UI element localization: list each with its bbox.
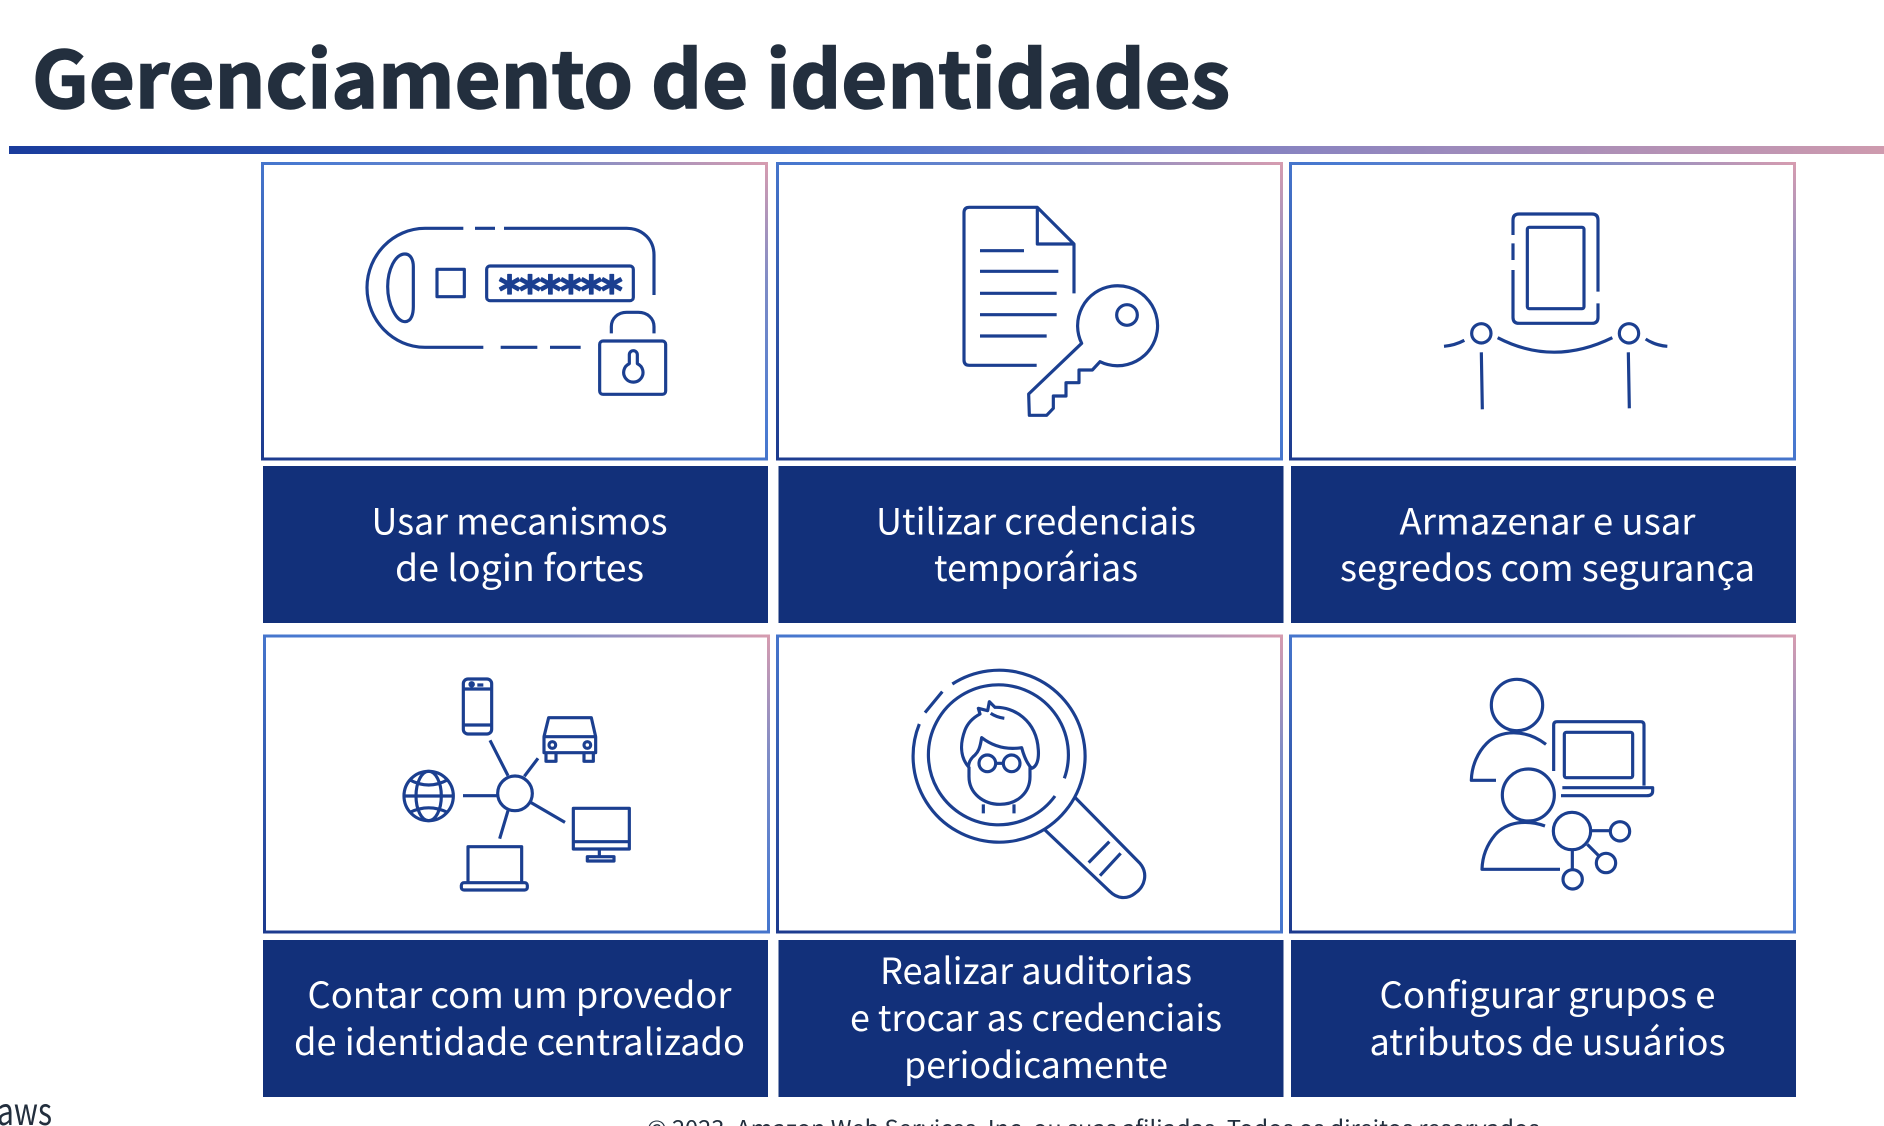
label: store secrets securely: Armazenar e usar bbox=[1400, 494, 1697, 546]
icon: password key fob with lock: ****** bbox=[499, 267, 623, 316]
panel: centralized identity provider bbox=[264, 636, 768, 932]
label: strong login mechanisms: Usar mecanismos bbox=[372, 494, 668, 546]
gradient header rule bbox=[9, 146, 1884, 154]
label: centralized identity provider bbox=[263, 940, 768, 1097]
label: user groups and attributes: atributos de usuários bbox=[1370, 1014, 1726, 1066]
label: centralized identity provider: de identidade centralizado bbox=[294, 1014, 745, 1066]
label: temporary credentials bbox=[778, 466, 1284, 623]
icon: document and key bbox=[964, 207, 1158, 415]
panel: audits and credential rotation bbox=[778, 636, 1282, 932]
icon: hub with connected devices bbox=[404, 679, 629, 890]
label: audits and credential rotation bbox=[778, 940, 1284, 1097]
label: temporary credentials: Utilizar credenciais bbox=[876, 494, 1196, 546]
label: audits and credential rotation: e trocar as credenciais bbox=[850, 990, 1222, 1042]
title: Gerenciamento de identidades bbox=[32, 19, 1230, 131]
label: store secrets securely: segredos com segurança bbox=[1340, 540, 1755, 592]
icon: framed secret behind rope bbox=[1444, 214, 1667, 409]
icon: password key fob with lock bbox=[367, 228, 666, 394]
label: store secrets securely bbox=[1291, 466, 1796, 623]
label: user groups and attributes bbox=[1291, 940, 1796, 1097]
label: centralized identity provider: Contar com um provedor bbox=[308, 967, 733, 1019]
label: temporary credentials: temporárias bbox=[934, 540, 1138, 592]
icon: users, laptop and attribute nodes bbox=[1471, 679, 1653, 889]
panel: temporary credentials bbox=[778, 164, 1282, 459]
label: audits and credential rotation: periodicamente bbox=[904, 1037, 1168, 1089]
label: strong login mechanisms bbox=[263, 466, 768, 623]
label: user groups and attributes: Configurar grupos e bbox=[1380, 967, 1716, 1019]
icon: magnifying glass over person bbox=[913, 670, 1145, 898]
panel: user groups and attributes bbox=[1290, 636, 1794, 932]
label: audits and credential rotation: Realizar auditorias bbox=[880, 943, 1192, 995]
label: strong login mechanisms: de login fortes bbox=[395, 540, 644, 592]
panel: strong login mechanisms bbox=[262, 164, 766, 459]
panel: store secrets securely bbox=[1290, 164, 1794, 459]
